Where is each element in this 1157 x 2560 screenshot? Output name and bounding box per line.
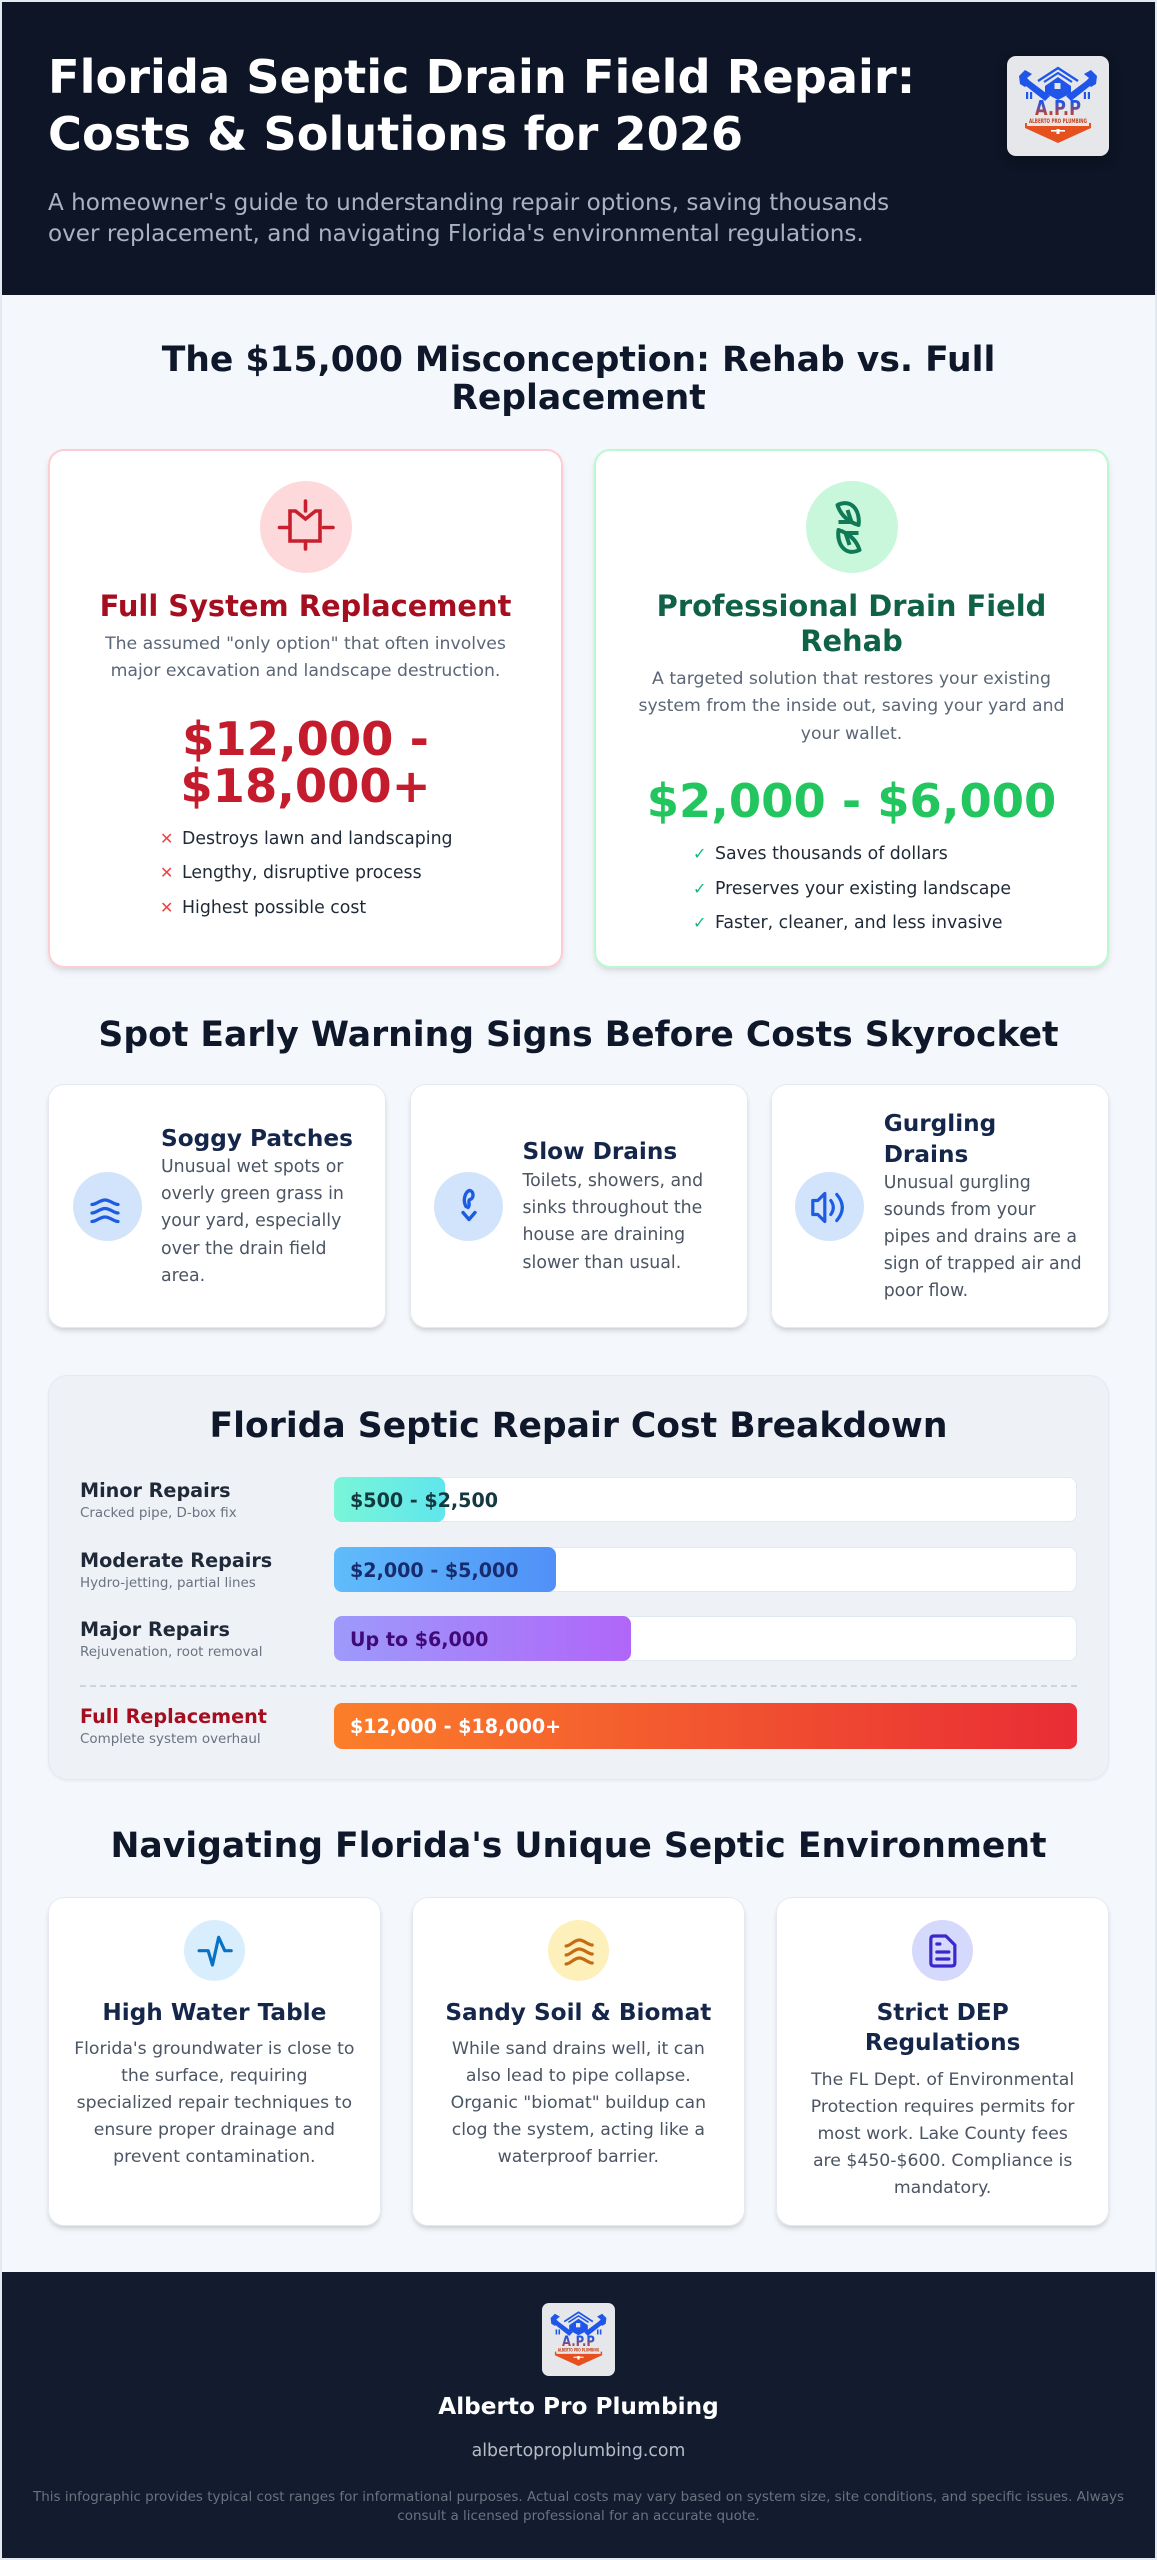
text: sandy soil: Organic "biomat" buildup can bbox=[451, 2093, 706, 2113]
text: soggy patches: your yard, especially bbox=[161, 1211, 341, 1231]
icon: pulse bbox=[184, 1920, 245, 1981]
panel: gurgling drains bbox=[771, 1084, 1109, 1328]
icon: sand waves bbox=[548, 1920, 609, 1981]
text: high water table: specialized repair techniques to bbox=[77, 2093, 352, 2113]
heading: misconception bbox=[162, 340, 995, 418]
text: sandy soil: While sand drains well, it can bbox=[452, 2039, 705, 2059]
heading: DEP regulations: Regulations bbox=[865, 2029, 1020, 2056]
heading: high water table: High Water Table bbox=[102, 1999, 326, 2026]
text: soggy patches bbox=[161, 1157, 344, 1286]
subtitle: A homeowner's guide to understanding repair options, saving thousands bbox=[48, 190, 889, 216]
row: full replacement bbox=[80, 1703, 1077, 1749]
title: Costs & Solutions for 2026 bbox=[48, 107, 743, 161]
icon: speaker bbox=[795, 1172, 864, 1240]
disclaimer bbox=[33, 2489, 1124, 2524]
bar: moderate repairs bbox=[334, 1547, 1077, 1592]
logo: footer: A.P.P bbox=[562, 2334, 595, 2350]
row: full replacement: Complete system overhaul bbox=[80, 1732, 261, 1746]
description: your wallet. bbox=[801, 724, 902, 744]
bar: major repairs bbox=[334, 1616, 1077, 1661]
text: soggy patches: area. bbox=[161, 1266, 205, 1286]
price: replacement bbox=[180, 712, 431, 813]
text: soggy patches: Unusual wet spots or bbox=[161, 1157, 343, 1177]
text: high water table: ensure proper drainage and bbox=[94, 2120, 335, 2140]
bar: minor repairs: $500 - $2,500 bbox=[350, 1489, 498, 1512]
description bbox=[105, 634, 506, 681]
text: DEP regulations: are $450-$600. Compliance is bbox=[813, 2151, 1072, 2171]
heading: warning signs: Spot Early Warning Signs Before Costs Skyrocket bbox=[98, 1015, 1059, 1055]
icon: document bbox=[912, 1920, 973, 1981]
bar: major repairs: Up to $6,000 bbox=[350, 1628, 488, 1651]
list: benefits bbox=[693, 844, 1011, 933]
price: replacement: $12,000 - bbox=[182, 712, 429, 766]
list: benefits: Preserves your existing landscape bbox=[715, 878, 1011, 898]
row: minor repairs: Cracked pipe, D-box fix bbox=[80, 1506, 237, 1520]
text: sandy soil: also lead to pipe collapse. bbox=[466, 2066, 691, 2086]
subtitle bbox=[48, 190, 889, 247]
text: gurgling drains: sign of trapped air and bbox=[884, 1254, 1082, 1274]
description bbox=[638, 669, 1065, 744]
header banner bbox=[2, 2, 1155, 295]
row: major repairs: Major Repairs bbox=[80, 1618, 230, 1640]
footer bbox=[2, 2272, 1155, 2558]
heading: drain field rehab: Professional Drain Field bbox=[657, 588, 1046, 622]
row: moderate repairs: Hydro-jetting, partial lines bbox=[80, 1576, 256, 1590]
text: DEP regulations: Protection requires permits for bbox=[811, 2097, 1074, 2117]
text: soggy patches: over the drain field bbox=[161, 1238, 327, 1258]
label: soggy patches: Soggy Patches bbox=[161, 1125, 353, 1152]
panel: high water table bbox=[48, 1897, 381, 2226]
row: minor repairs: Minor Repairs bbox=[80, 1478, 231, 1502]
panel: full system replacement bbox=[48, 449, 563, 968]
panel: sandy soil and biomat bbox=[412, 1897, 745, 2226]
heading: florida environment: Navigating Florida's Unique Septic Environment bbox=[110, 1826, 1047, 1866]
heading: sandy soil: Sandy Soil & Biomat bbox=[445, 1999, 711, 2026]
heading: DEP regulations bbox=[865, 1999, 1020, 2056]
text: soggy patches: overly green grass in bbox=[161, 1184, 344, 1204]
text: sandy soil: clog the system, acting like a bbox=[452, 2120, 705, 2140]
text: DEP regulations: mandatory. bbox=[894, 2178, 991, 2198]
text: sandy soil: waterproof barrier. bbox=[498, 2147, 659, 2167]
description: major excavation and landscape destruction. bbox=[111, 661, 500, 681]
price: rehab: $2,000 - $6,000 bbox=[647, 774, 1056, 828]
icon: water waves bbox=[72, 1172, 142, 1240]
row: moderate repairs bbox=[80, 1547, 1077, 1592]
icon: excavation bbox=[260, 481, 352, 573]
panel: cost breakdown chart bbox=[48, 1375, 1109, 1780]
text: slow drains: sinks throughout the bbox=[522, 1198, 702, 1218]
panel: slow drains bbox=[410, 1084, 748, 1328]
price: replacement: $18,000+ bbox=[180, 759, 431, 813]
text: high water table: Florida's groundwater is close to bbox=[74, 2039, 354, 2059]
panel: full system replacement: ✕ bbox=[160, 863, 173, 882]
panel: full system replacement: ✕ bbox=[160, 828, 173, 848]
disclaimer: This infographic provides typical cost ranges for informational purposes. Actual costs may vary based on system size, site conditions, and specific issues. Always bbox=[33, 2489, 1124, 2505]
text: slow drains bbox=[522, 1171, 703, 1272]
panel: professional drain field rehab: ✓ bbox=[693, 844, 706, 862]
text: gurgling drains bbox=[884, 1173, 1082, 1301]
company name: Alberto Pro Plumbing bbox=[438, 2393, 719, 2420]
page background bbox=[2, 295, 1155, 2272]
icon: slow drain bbox=[434, 1172, 503, 1240]
disclaimer: consult a licensed professional for an accurate quote. bbox=[397, 2508, 760, 2524]
bar: minor repairs bbox=[334, 1477, 1077, 1522]
list: drawbacks: Lengthy, disruptive process bbox=[182, 863, 422, 883]
text: gurgling drains: sounds from your bbox=[884, 1200, 1036, 1220]
text: sandy soil bbox=[451, 2039, 706, 2167]
label: gurgling drains bbox=[884, 1110, 996, 1168]
text: DEP regulations: most work. Lake County fees bbox=[817, 2124, 1068, 2144]
heading: drain field rehab: Rehab bbox=[800, 624, 903, 658]
panel: strict DEP regulations bbox=[776, 1897, 1109, 2226]
label: slow drains: Slow Drains bbox=[522, 1138, 677, 1165]
panel: professional drain field rehab: ✓ bbox=[693, 878, 706, 898]
label: gurgling drains: Gurgling bbox=[884, 1110, 996, 1137]
bar: full replacement: $12,000 - $18,000+ bbox=[350, 1715, 561, 1738]
text: slow drains: house are draining bbox=[522, 1225, 685, 1245]
bar: moderate repairs: $2,000 - $5,000 bbox=[350, 1559, 519, 1582]
heading: cost breakdown: Florida Septic Repair Cost Breakdown bbox=[210, 1406, 947, 1446]
panel: professional drain field rehab bbox=[594, 449, 1109, 968]
logo: Alberto Pro Plumbing: A.P.P bbox=[1035, 96, 1081, 120]
heading: drain field rehab bbox=[657, 588, 1046, 658]
section: misconception comparison bbox=[46, 340, 1110, 972]
website: albertoproplumbing.com bbox=[472, 2441, 685, 2461]
row: major repairs: Rejuvenation, root removal bbox=[80, 1644, 262, 1660]
list: benefits: Faster, cleaner, and less invasive bbox=[715, 913, 1003, 933]
text: gurgling drains: poor flow. bbox=[884, 1281, 968, 1301]
text: high water table: the surface, requiring bbox=[121, 2066, 308, 2086]
logo: Alberto Pro Plumbing bbox=[1007, 56, 1109, 156]
icon: leaves bbox=[806, 481, 898, 573]
text: gurgling drains: pipes and drains are a bbox=[884, 1227, 1077, 1247]
description: system from the inside out, saving your yard and bbox=[638, 696, 1065, 716]
description: A targeted solution that restores your existing bbox=[652, 669, 1051, 689]
text: high water table: prevent contamination. bbox=[113, 2147, 316, 2167]
list: drawbacks: Highest possible cost bbox=[182, 898, 366, 918]
text: gurgling drains: Unusual gurgling bbox=[884, 1173, 1031, 1193]
title bbox=[48, 50, 915, 161]
label: gurgling drains: Drains bbox=[884, 1141, 968, 1168]
row: moderate repairs: Moderate Repairs bbox=[80, 1548, 272, 1572]
section: florida environment bbox=[47, 1826, 1110, 2230]
heading: misconception: The $15,000 Misconception: Rehab vs. Full bbox=[162, 340, 995, 380]
bar: full replacement bbox=[334, 1703, 1077, 1749]
text: slow drains: Toilets, showers, and bbox=[522, 1171, 703, 1191]
row: major repairs bbox=[80, 1616, 1077, 1661]
heading: misconception: Replacement bbox=[451, 378, 706, 418]
panel: professional drain field rehab: ✓ bbox=[693, 913, 706, 932]
subtitle: over replacement, and navigating Florida's environmental regulations. bbox=[48, 221, 864, 247]
section: warning signs bbox=[47, 1015, 1110, 1332]
text: high water table bbox=[74, 2039, 354, 2167]
panel: soggy patches bbox=[48, 1084, 386, 1328]
list: drawbacks bbox=[160, 828, 453, 918]
row: full replacement: Full Replacement bbox=[80, 1704, 267, 1728]
row: minor repairs bbox=[80, 1477, 1077, 1522]
text: DEP regulations bbox=[811, 2070, 1074, 2198]
heading: DEP regulations: Strict DEP bbox=[877, 1999, 1009, 2026]
description: The assumed "only option" that often involves bbox=[105, 634, 506, 654]
logo: footer bbox=[542, 2303, 615, 2376]
title: Florida Septic Drain Field Repair: bbox=[48, 50, 915, 104]
text: DEP regulations: The FL Dept. of Environmental bbox=[811, 2070, 1074, 2090]
text: slow drains: slower than usual. bbox=[522, 1252, 681, 1272]
panel: full system replacement: ✕ bbox=[160, 898, 173, 917]
heading: full system replacement: Full System Replacement bbox=[100, 588, 511, 622]
list: drawbacks: Destroys lawn and landscaping bbox=[182, 828, 453, 848]
list: benefits: Saves thousands of dollars bbox=[715, 844, 948, 864]
